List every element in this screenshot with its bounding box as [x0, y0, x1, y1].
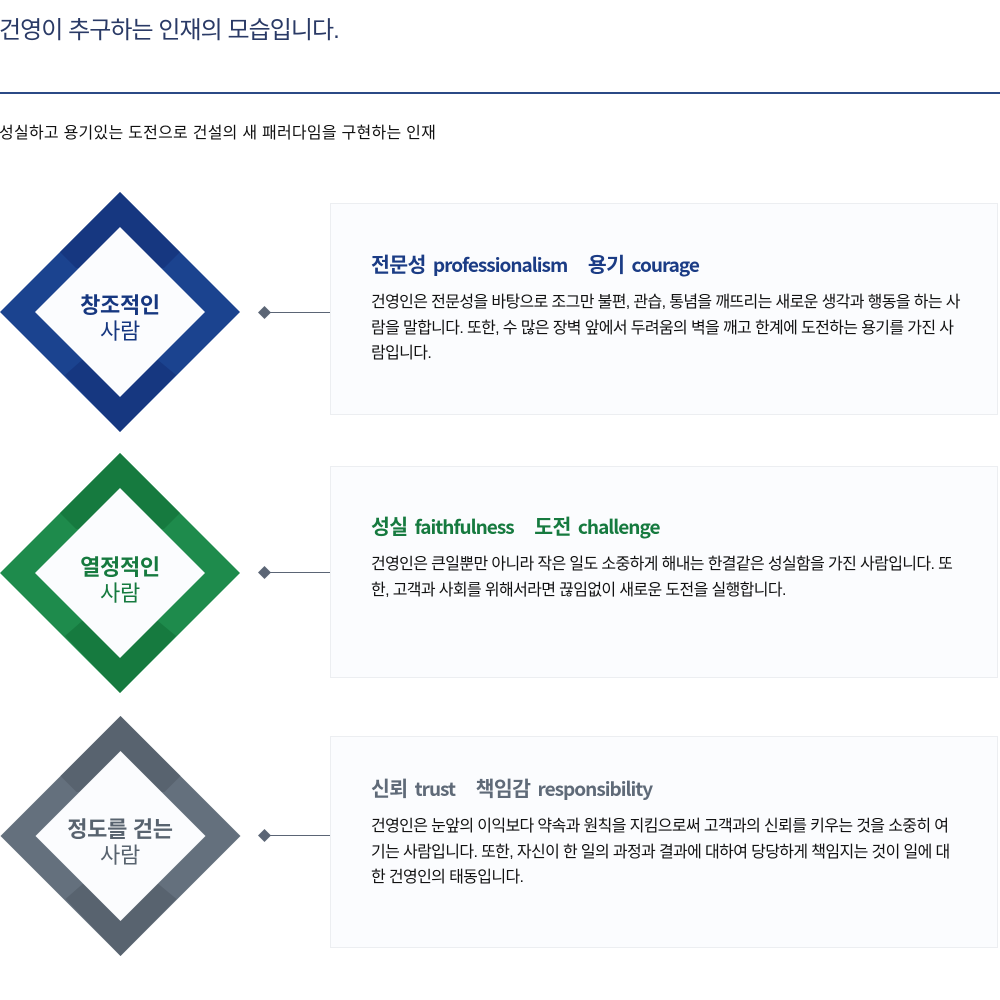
body text — [371, 556, 952, 599]
connector 2 — [258, 566, 330, 579]
label: creative person: 창조적인 — [80, 293, 160, 318]
body text: 한, 고객과 사회를 위해서라면 끊임없이 새로운 도전을 실행합니다. — [371, 582, 786, 599]
body text: 람을 말합니다. 또한, 수 많은 장벽 앞에서 두려움의 벽을 깨고 한계에 도전하는 용기를 가진 사 — [371, 320, 953, 337]
label: person walking the right path — [67, 817, 173, 868]
connector 3 — [258, 829, 330, 842]
label: passionate person: 사람 — [100, 581, 140, 606]
body text: 건영인은 눈앞의 이익보다 약속과 원칙을 지킴으로써 고객과의 신뢰를 키우는 것을 소중히 여 — [371, 818, 948, 835]
body text: 기는 사람입니다. 또한, 자신이 한 일의 과정과 결과에 대하여 당당하게 책임지는 것이 일에 대 — [371, 844, 950, 861]
diamond: person walking the right path — [0, 716, 240, 956]
title: 건영이 추구하는 인재의 모습입니다. — [0, 17, 339, 44]
body text: 건영인은 전문성을 바탕으로 조그만 불편, 관습, 통념을 깨뜨리는 새로운 생각과 행동을 하는 사 — [371, 294, 960, 311]
body text: 한 건영인의 태동입니다. — [371, 869, 523, 886]
label: passionate person: 열정적인 — [80, 555, 160, 580]
heading: 전문성 professionalism 용기 courage — [371, 248, 699, 278]
panel: professionalism and courage — [330, 203, 998, 415]
subtitle: 성실하고 용기있는 도전으로 건설의 새 패러다임을 구현하는 인재 — [0, 125, 436, 142]
label: creative person — [80, 293, 160, 344]
body text: 건영인은 큰일뿐만 아니라 작은 일도 소중하게 해내는 한결같은 성실함을 가진 사람입니다. 또 — [371, 556, 952, 573]
heading: 신뢰 trust 책임감 responsibility — [371, 772, 652, 802]
body text — [371, 294, 960, 362]
body text — [371, 818, 950, 886]
heading: 성실 faithfulness 도전 challenge — [371, 510, 660, 540]
label: passionate person — [80, 555, 160, 606]
panel: trust and responsibility — [330, 736, 998, 948]
body text: 람입니다. — [371, 345, 431, 362]
connector 1 — [258, 306, 330, 319]
panel: faithfulness and challenge — [330, 466, 998, 678]
label: person walking the right path: 정도를 걷는 — [67, 817, 173, 842]
label: creative person: 사람 — [100, 319, 140, 344]
label: person walking the right path: 사람 — [100, 843, 140, 868]
diamond: creative person — [0, 192, 240, 432]
diamond: passionate person — [0, 453, 240, 693]
